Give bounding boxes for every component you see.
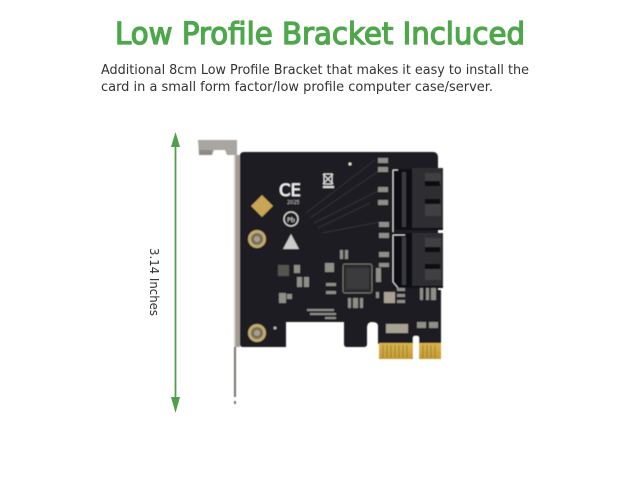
controller chip — [343, 264, 372, 293]
circuit board — [240, 152, 443, 360]
CE mark: CE — [279, 181, 301, 201]
Pb free mark — [284, 212, 298, 226]
title: Low Profile Bracket Incluced — [115, 17, 525, 52]
gold fingers — [379, 343, 441, 359]
small dot — [274, 326, 276, 330]
description text: Additional 8cm Low Profile Bracket that makes it easy to install the — [101, 62, 529, 78]
qfn chip small — [278, 265, 289, 276]
mounting screw top — [248, 230, 266, 248]
year mark: 2025 — [287, 200, 300, 206]
sata connector bottom — [393, 233, 443, 288]
key notch — [413, 336, 419, 360]
sata connector top — [393, 168, 443, 232]
finger gaps — [383, 345, 435, 358]
description text: card in a small form factor/low profile computer case/server. — [101, 79, 493, 95]
Pb free mark: Pb — [287, 216, 295, 224]
low profile bracket — [198, 140, 240, 404]
description text — [101, 62, 529, 95]
gold diamond pad — [251, 195, 273, 217]
pcb outline — [240, 152, 441, 347]
component pad — [384, 292, 395, 303]
recycle bin mark — [323, 174, 334, 187]
pcie capacitor pads — [386, 324, 408, 333]
mounting screw bottom — [248, 324, 266, 342]
board traces — [306, 160, 380, 233]
led dot — [348, 162, 352, 166]
ESD warning mark — [283, 234, 299, 249]
height label: 3.14 Inches — [147, 248, 162, 316]
height dimension arrow — [171, 132, 180, 413]
component clusters — [279, 158, 438, 328]
